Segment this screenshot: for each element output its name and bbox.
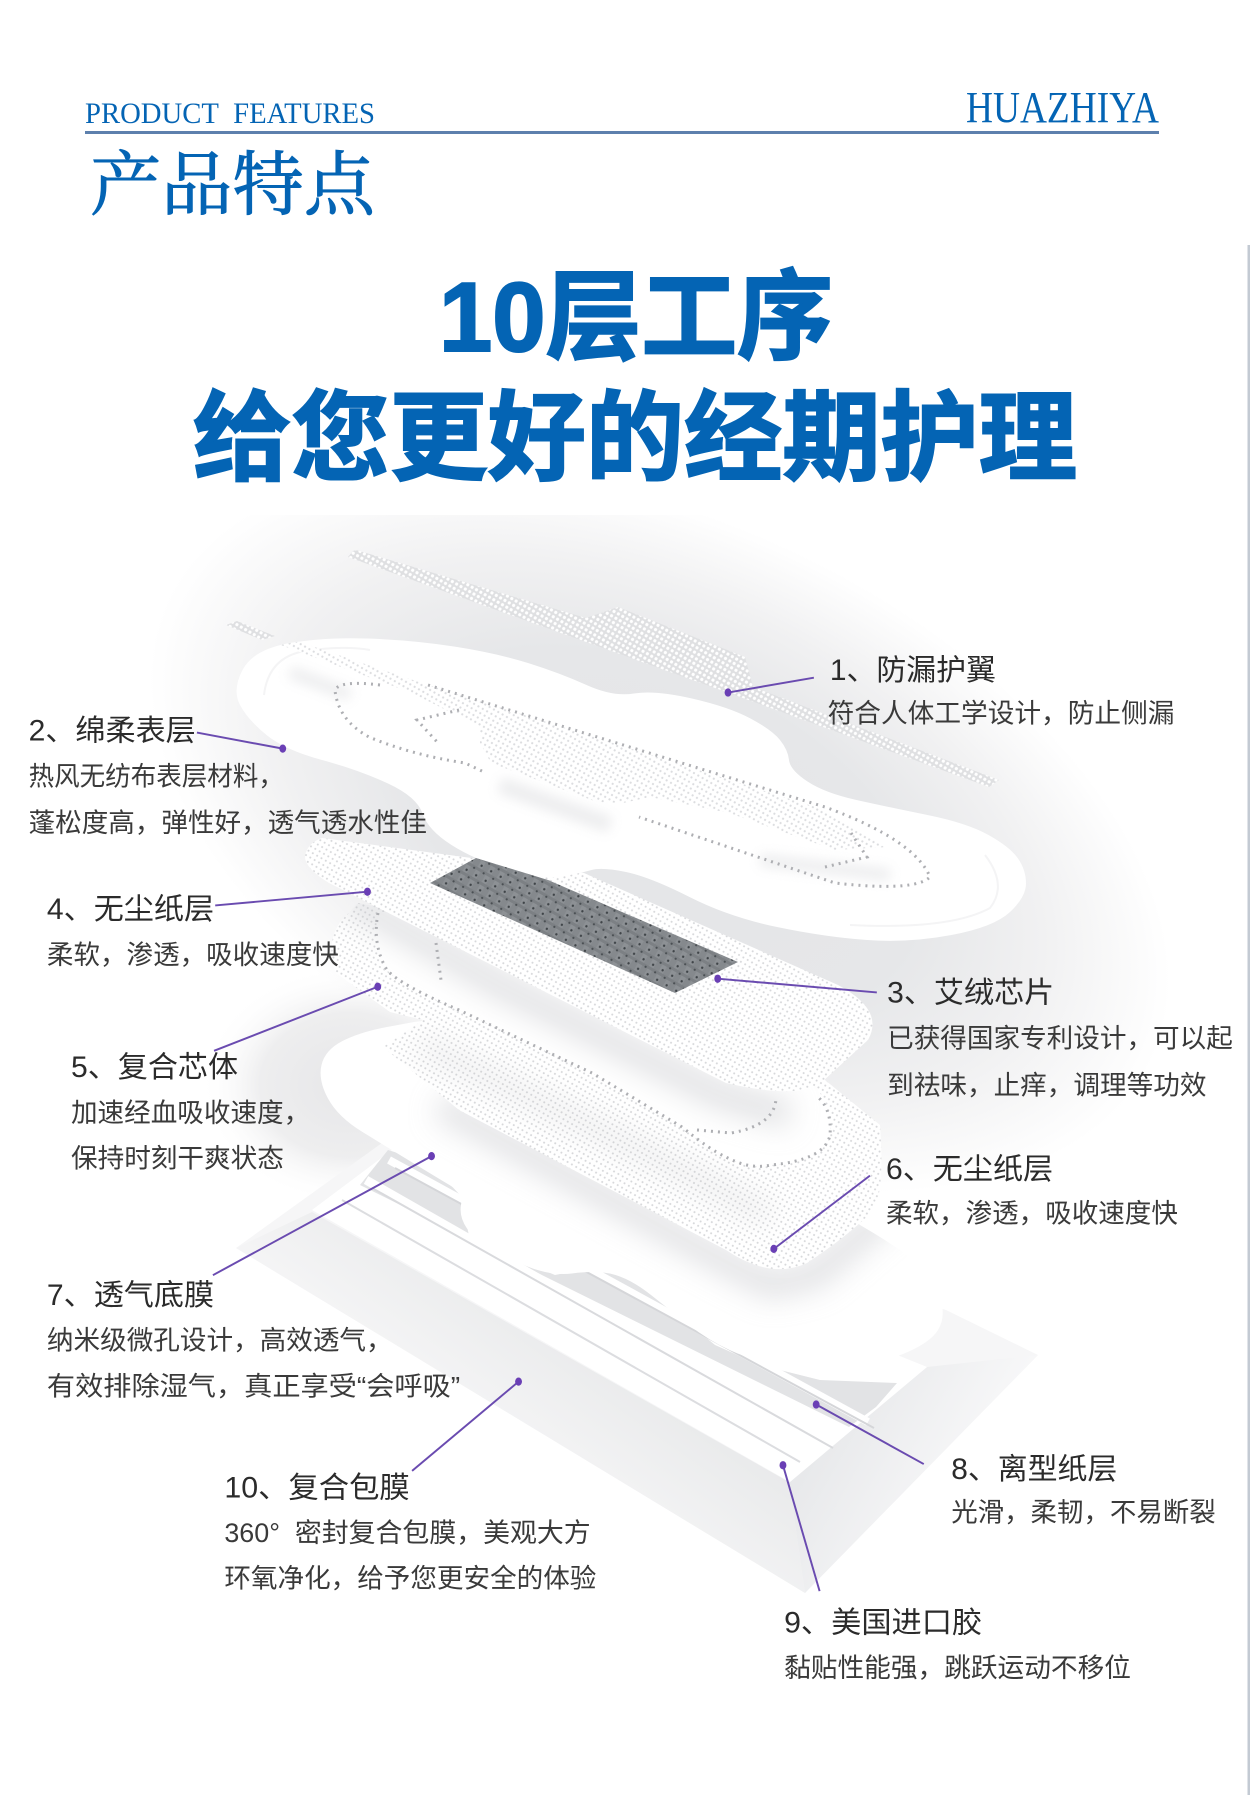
layer 2: soft top sheet — [236, 638, 1026, 941]
leader 6 — [770, 1176, 870, 1253]
leader 9 — [780, 1461, 820, 1591]
label 5: 保持时刻干爽状态 — [71, 1144, 284, 1174]
label 10 — [224, 1471, 596, 1594]
header rule — [85, 131, 1159, 134]
label 1: 符合人体工学设计，防止侧漏 — [828, 698, 1174, 728]
leader 5 — [214, 983, 381, 1051]
label 9: 黏贴性能强，跳跃运动不移位 — [784, 1653, 1131, 1683]
label 3: 已获得国家专利设计，可以起 — [887, 1023, 1233, 1053]
right edge strip — [1248, 245, 1250, 1795]
label 8: 光滑，柔韧，不易断裂 — [951, 1497, 1216, 1527]
label 10: 环氧净化，给予您更安全的体验 — [224, 1564, 596, 1594]
label 6 — [886, 1153, 1178, 1229]
label 10: 360° 密封复合包膜，美观大方 — [224, 1518, 591, 1548]
label 8: 8、离型纸层 — [951, 1453, 1117, 1486]
section heading: 产品特点 — [90, 148, 377, 225]
label 2: 热风无纺布表层材料， — [29, 761, 284, 791]
label 7: 7、透气底膜 — [47, 1279, 214, 1312]
layer 4: dust-free paper — [305, 838, 872, 1091]
layer 7: breathable back film — [321, 1000, 943, 1367]
label 2 — [29, 715, 427, 838]
leader 1 — [725, 678, 814, 697]
title line 1: 10层工序 — [439, 262, 833, 372]
leader 10 — [412, 1378, 522, 1471]
label 3: 3、艾绒芯片 — [887, 977, 1054, 1010]
label 4: 4、无尘纸层 — [47, 893, 214, 926]
header: product features: PRODUCT FEATURES — [85, 97, 375, 130]
product exploded diagram — [223, 519, 1098, 1593]
label 9 — [784, 1606, 1131, 1683]
background glow — [223, 519, 1098, 1172]
main title — [193, 262, 1077, 493]
leader 7 — [213, 1152, 435, 1275]
leader lines — [197, 678, 924, 1591]
label 6: 柔软，渗透，吸收速度快 — [886, 1199, 1178, 1229]
label 2: 蓬松度高，弹性好，透气透水性佳 — [29, 808, 427, 838]
label 5 — [71, 1051, 310, 1174]
leader 3 — [714, 975, 877, 992]
feature labels — [29, 654, 1233, 1683]
label 1 — [828, 654, 1174, 728]
label 3 — [887, 977, 1233, 1100]
core dashed outlines — [376, 913, 830, 1166]
label 2: 2、绵柔表层 — [29, 715, 196, 748]
label 4: 柔软，渗透，吸收速度快 — [47, 940, 339, 970]
label 5: 5、复合芯体 — [71, 1051, 238, 1084]
label 6: 6、无尘纸层 — [886, 1153, 1053, 1186]
top sheet rim — [264, 648, 998, 926]
label 4 — [47, 893, 339, 970]
title line 2: 给您更好的经期护理 — [193, 383, 1077, 493]
layers 5-6: composite core and dust-free paper — [331, 903, 882, 1269]
label 3: 到祛味，止痒，调理等功效 — [887, 1070, 1207, 1100]
label 9: 9、美国进口胶 — [784, 1606, 982, 1639]
top sheet dotted band — [282, 642, 884, 850]
header: brand name: HUAZHIYA — [966, 83, 1159, 132]
layer 10: composite wrap film — [236, 1130, 1038, 1593]
label 5: 加速经血吸收速度， — [71, 1098, 310, 1128]
top sheet shading — [290, 672, 890, 875]
label 1: 1、防漏护翼 — [830, 654, 996, 687]
label 8 — [951, 1453, 1216, 1527]
layer 1: leak-guard wing band — [348, 550, 998, 787]
layer 2 wing tip band — [226, 621, 275, 640]
header — [85, 83, 1159, 225]
top sheet dashed outlines — [335, 683, 930, 886]
label 7: 有效排除湿气，真正享受“会呼吸” — [47, 1371, 460, 1401]
layer 3: mugwort chip — [430, 858, 738, 993]
layers 8-9: release paper and adhesive strips — [312, 1150, 927, 1482]
leader 8 — [813, 1400, 924, 1464]
label 7 — [47, 1279, 460, 1401]
label 7: 纳米级微孔设计，高效透气， — [47, 1326, 393, 1356]
label 10: 10、复合包膜 — [224, 1471, 410, 1504]
leader 4 — [215, 888, 371, 905]
leader 2 — [197, 733, 286, 753]
core centre — [376, 890, 830, 1166]
